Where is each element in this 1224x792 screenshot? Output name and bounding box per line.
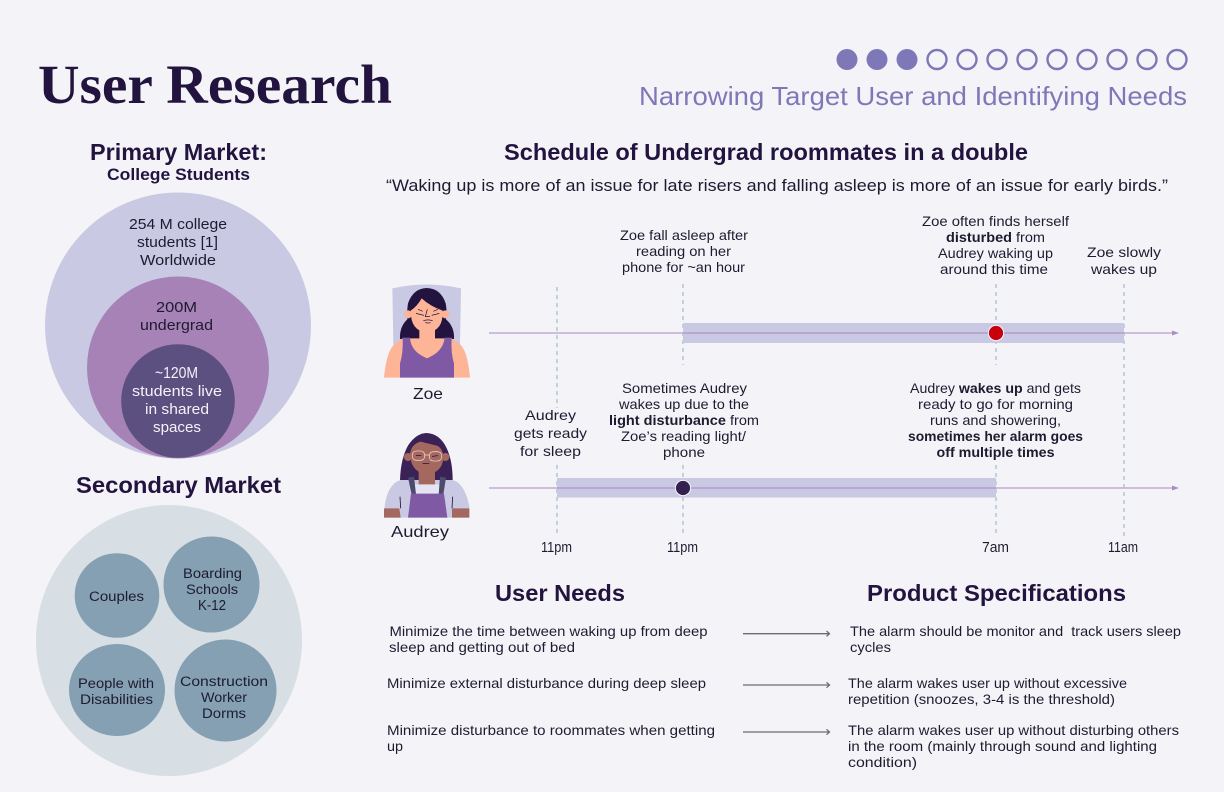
chart: primary market nested circles: undergrad <box>140 317 213 334</box>
spec 2: repetition (snoozes, 3-4 is the threshold) <box>848 691 1115 707</box>
annotation: Audrey wakes up: sometimes her alarm goes <box>908 428 1083 444</box>
chart: primary market nested circles: in shared <box>145 401 209 418</box>
annotation: Audrey gets ready: Audrey <box>525 407 576 423</box>
chart: primary market nested circles <box>45 192 311 458</box>
time axis labels <box>541 540 1138 556</box>
chart: secondary market circles: Couples <box>89 589 144 604</box>
chart: secondary market circles: Dorms <box>202 706 246 721</box>
annotation: Zoe disturbed <box>922 213 1069 277</box>
annotation: Audrey wakes up: off multiple times <box>936 444 1055 460</box>
annotation: Zoe falls asleep <box>620 227 748 275</box>
heading: schedule: Schedule of Undergrad roommates in a double <box>504 139 1028 165</box>
annotation: Zoe falls asleep: phone for ~an hour <box>622 259 745 275</box>
chart: primary market nested circles: spaces <box>153 419 201 436</box>
annotation: Zoe wakes: wakes up <box>1090 261 1157 277</box>
annotation: Zoe disturbed: Zoe often finds herself <box>922 213 1069 229</box>
spec 1 <box>850 623 1181 655</box>
chart: primary market nested circles: Worldwide <box>140 252 216 269</box>
annotation: Zoe disturbed: Audrey waking up <box>938 245 1053 261</box>
time axis labels: 11pm <box>667 540 698 556</box>
spec 2: The alarm wakes user up without excessive <box>848 675 1127 691</box>
need 3: up <box>387 738 403 754</box>
arrow 3 <box>743 729 830 735</box>
chart: primary market nested circles: students [1] <box>137 234 218 251</box>
arrow 1 <box>743 631 830 636</box>
chart: primary market nested circles: 200M <box>156 299 197 316</box>
chart: secondary market circles: Disabilities <box>80 692 153 707</box>
annotation: Audrey light disturbance: phone <box>663 444 705 460</box>
label: Audrey: Audrey <box>391 524 449 541</box>
annotation: Audrey light disturbance: Zoe’s reading light/ <box>621 428 746 444</box>
annotation: Zoe wakes: Zoe slowly <box>1087 244 1161 260</box>
title: User Research <box>38 54 392 115</box>
heading: user needs: User Needs <box>495 580 625 606</box>
subtitle: Narrowing Target User and Identifying Needs <box>639 81 1187 111</box>
chart: secondary market circles <box>36 505 302 776</box>
need 1 <box>389 623 708 655</box>
icon: Audrey portrait <box>384 433 469 518</box>
Audrey sleep bar <box>557 478 996 498</box>
spec 1: cycles <box>850 639 891 655</box>
need 3: Minimize disturbance to roommates when getting <box>387 722 715 738</box>
progress dots <box>836 49 1186 70</box>
annotation: Audrey gets ready <box>514 407 587 459</box>
icon: Zoe sleeping portrait <box>384 284 470 378</box>
spec 3: The alarm wakes user up without disturbing others <box>848 722 1179 738</box>
Zoe sleep bar <box>683 323 1124 343</box>
need 3 <box>387 722 715 754</box>
arrow 2 <box>743 682 830 688</box>
need 1: Minimize the time between waking up from deep <box>390 623 708 639</box>
heading: primary market <box>90 139 267 184</box>
heading: primary market: College Students <box>107 166 250 184</box>
chart: primary market nested circles: ~120M <box>155 365 198 382</box>
label: Zoe: Zoe <box>413 386 443 403</box>
spec 1: The alarm should be monitor and track users sleep <box>850 623 1181 639</box>
annotation: Audrey wakes up <box>908 380 1083 460</box>
time axis labels: 7am <box>982 540 1009 556</box>
time axis labels: 11pm <box>541 540 572 556</box>
chart: secondary market circles: Schools <box>186 582 238 597</box>
spec 3: condition) <box>848 754 917 770</box>
annotation: Audrey light disturbance: wakes up due to the <box>618 396 749 412</box>
annotation: Zoe disturbed: around this time <box>940 261 1048 277</box>
need 1: sleep and getting out of bed <box>389 639 575 655</box>
annotation: Audrey gets ready: gets ready <box>514 425 587 441</box>
annotation: Zoe falls asleep: reading on her <box>636 243 731 259</box>
spec 3 <box>848 722 1179 770</box>
annotation: Audrey light disturbance: Sometimes Audrey <box>622 380 747 396</box>
chart: primary market nested circles: students live <box>132 383 222 400</box>
annotation: Zoe disturbed: disturbed from <box>946 229 1045 245</box>
annotation: Zoe falls asleep: Zoe fall asleep after <box>620 227 748 243</box>
annotation: Zoe wakes <box>1087 244 1161 277</box>
chart: secondary market circles: K-12 <box>198 598 226 614</box>
annotation: Audrey wakes up: runs and showering, <box>930 412 1061 428</box>
chart: primary market nested circles: 254 M college <box>129 216 227 233</box>
chart: secondary market circles: Worker <box>201 690 248 705</box>
time axis labels: 11am <box>1108 540 1138 556</box>
annotation: Audrey light disturbance: light disturbance from <box>609 412 759 428</box>
annotation: Audrey wakes up: Audrey wakes up and gets <box>910 380 1081 396</box>
heading: primary market: Primary Market: <box>90 139 267 165</box>
spec 2 <box>848 675 1127 707</box>
need 2: Minimize external disturbance during deep sleep <box>387 675 706 691</box>
quote: “Waking up is more of an issue for late risers and falling asleep is more of an issue for early birds.” <box>386 176 1168 195</box>
chart: secondary market circles: People with <box>78 676 154 691</box>
chart: secondary market circles: Construction <box>180 674 268 689</box>
spec 3: in the room (mainly through sound and lighting <box>848 738 1157 754</box>
heading: secondary market: Secondary Market <box>76 472 281 498</box>
heading: product specifications: Product Specifications <box>867 580 1126 606</box>
annotation: Audrey gets ready: for sleep <box>520 443 581 459</box>
annotation: Audrey wakes up: ready to go for morning <box>918 396 1073 412</box>
chart: secondary market circles: Boarding <box>183 566 242 581</box>
annotation: Audrey light disturbance <box>609 380 759 460</box>
timeline chart <box>489 284 1179 537</box>
